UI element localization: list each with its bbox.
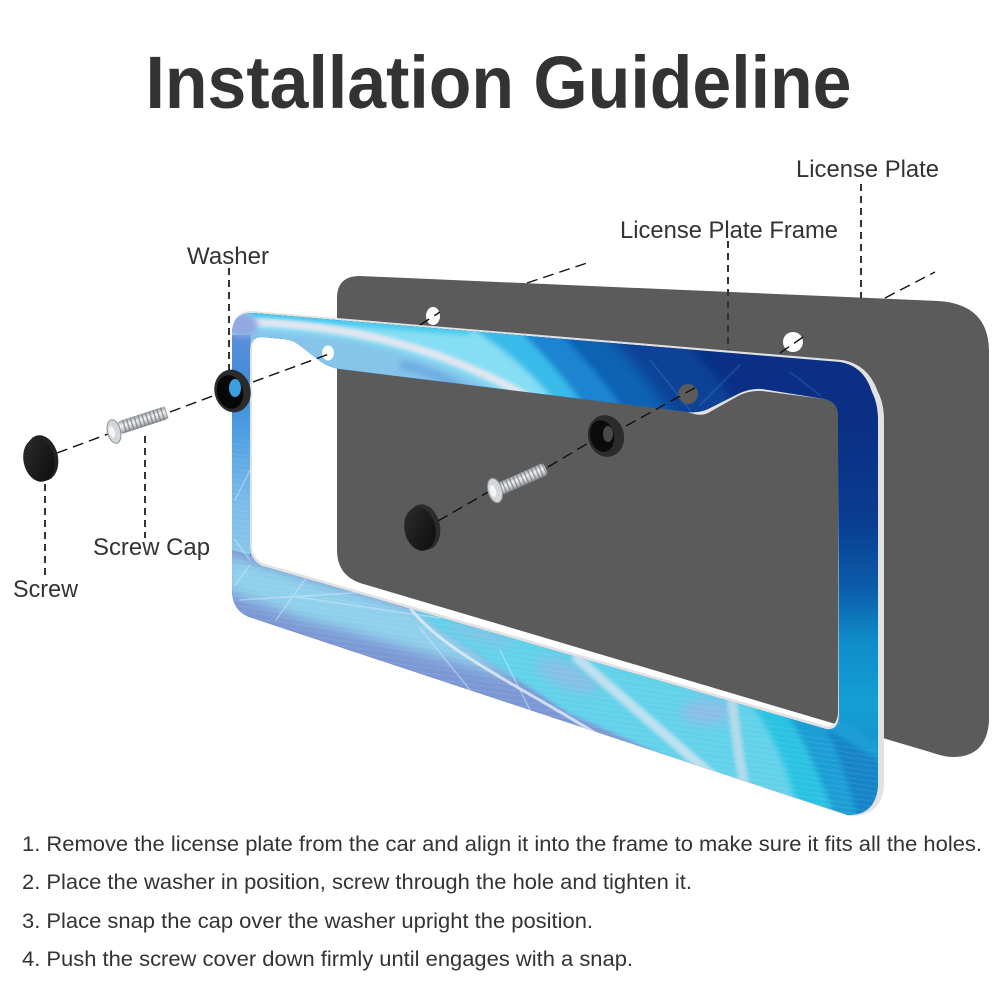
frame hole left (322, 346, 334, 360)
screw cap right (400, 501, 444, 554)
screw cap left (19, 432, 62, 485)
label: washer: Washer (187, 243, 269, 270)
screw right (485, 463, 548, 504)
bottom and left fine texture (225, 440, 905, 830)
bottom bar colours (225, 548, 840, 830)
assembly dashed lines (57, 262, 935, 521)
step 2: 2. Place the washer in position, screw through the hole and tighten it. (22, 871, 692, 894)
top bar colours (232, 313, 736, 412)
label: screw cap: Screw Cap (93, 534, 210, 561)
step 1: 1. Remove the license plate from the car and align it into the frame to make sure it fits all the holes. (22, 833, 982, 856)
right side colours (836, 422, 878, 815)
installation steps (22, 833, 982, 971)
frame edge thickness (232, 311, 884, 816)
top bar white swoosh (251, 316, 533, 393)
screw left (105, 406, 169, 445)
washer left (210, 366, 255, 416)
left side colours (232, 335, 250, 618)
washer right (583, 411, 629, 461)
frame artwork (232, 313, 878, 815)
plate hole left (426, 307, 440, 325)
license plate (337, 276, 989, 757)
title: Installation Guideline (146, 41, 852, 124)
label leader lines (45, 184, 861, 577)
license plate frame (225, 300, 905, 830)
label: screw: Screw (13, 576, 79, 603)
step 3: 3. Place snap the cap over the washer upright the position. (22, 910, 593, 933)
label: license plate: License Plate (796, 156, 939, 183)
bottom bar white streaks (235, 360, 820, 790)
label: license plate frame: License Plate Frame (620, 217, 838, 244)
plate hole right (783, 332, 803, 352)
frame hole right (678, 384, 698, 404)
step 4: 4. Push the screw cover down firmly until engages with a snap. (22, 948, 633, 971)
